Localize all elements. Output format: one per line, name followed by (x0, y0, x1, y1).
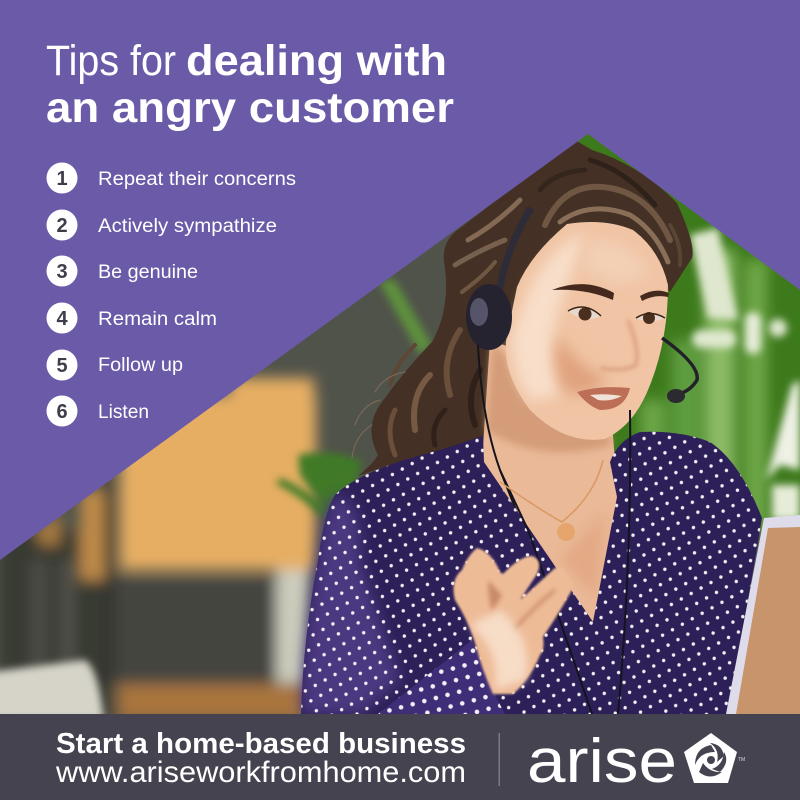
website address: www.ariseworkfromhome.com (55, 756, 466, 789)
tip 6: 6 (56, 401, 68, 423)
tip 6: Listen (98, 402, 149, 423)
tip 5: Follow up (98, 355, 183, 376)
green plants on the right (575, 130, 800, 540)
right eyebrow (640, 291, 669, 301)
necklace with pendant (500, 460, 603, 541)
tip 3 (46, 256, 198, 286)
tip 1: 1 (56, 168, 68, 190)
trademark: TM (738, 757, 745, 763)
microphone boom (662, 338, 697, 395)
sleeve cuff (378, 640, 505, 714)
title: dealing with (186, 37, 447, 85)
tip 5: 5 (56, 355, 68, 377)
tip 1: Repeat their concerns (98, 169, 296, 190)
gesturing hand (454, 548, 573, 694)
title (46, 37, 454, 132)
tip 6 (46, 396, 149, 426)
title: an angry customer (46, 84, 454, 132)
hair (352, 140, 693, 476)
call to action: Start a home-based business (56, 728, 466, 760)
title: Tips for (46, 37, 176, 85)
ear cup (466, 284, 512, 350)
right eye (636, 312, 665, 324)
tip 1 (46, 162, 296, 194)
tip 4: 4 (56, 308, 68, 330)
tip 2: 2 (56, 215, 68, 237)
numbered tips list (46, 162, 296, 426)
blouse (301, 432, 762, 714)
mouth (577, 387, 630, 410)
arise wordmark: arise (527, 727, 677, 796)
tip 3: Be genuine (98, 262, 198, 283)
cables over blouse (500, 410, 630, 714)
left eyebrow (552, 284, 614, 300)
arise pentagon logo (684, 733, 737, 783)
headset (466, 208, 697, 403)
purple header panel (0, 0, 800, 560)
headband (498, 208, 531, 298)
left cable on neck (477, 345, 518, 512)
tip 2 (46, 210, 277, 240)
neck and chest (482, 340, 618, 622)
nose (600, 320, 637, 369)
tip 3: 3 (56, 261, 68, 283)
tip 2: Actively sympathize (98, 216, 277, 237)
plant behind left shoulder (276, 453, 362, 520)
photo: agent with headset in an office (0, 130, 800, 720)
office background (0, 199, 762, 714)
tip 5 (46, 350, 183, 380)
face (506, 222, 669, 440)
curl highlights (468, 200, 520, 240)
laptop (726, 515, 800, 714)
tip 4 (46, 302, 217, 334)
left eye (568, 307, 601, 320)
tip 4: Remain calm (98, 309, 217, 330)
microphone tip (667, 389, 685, 403)
footer bar (0, 714, 800, 800)
